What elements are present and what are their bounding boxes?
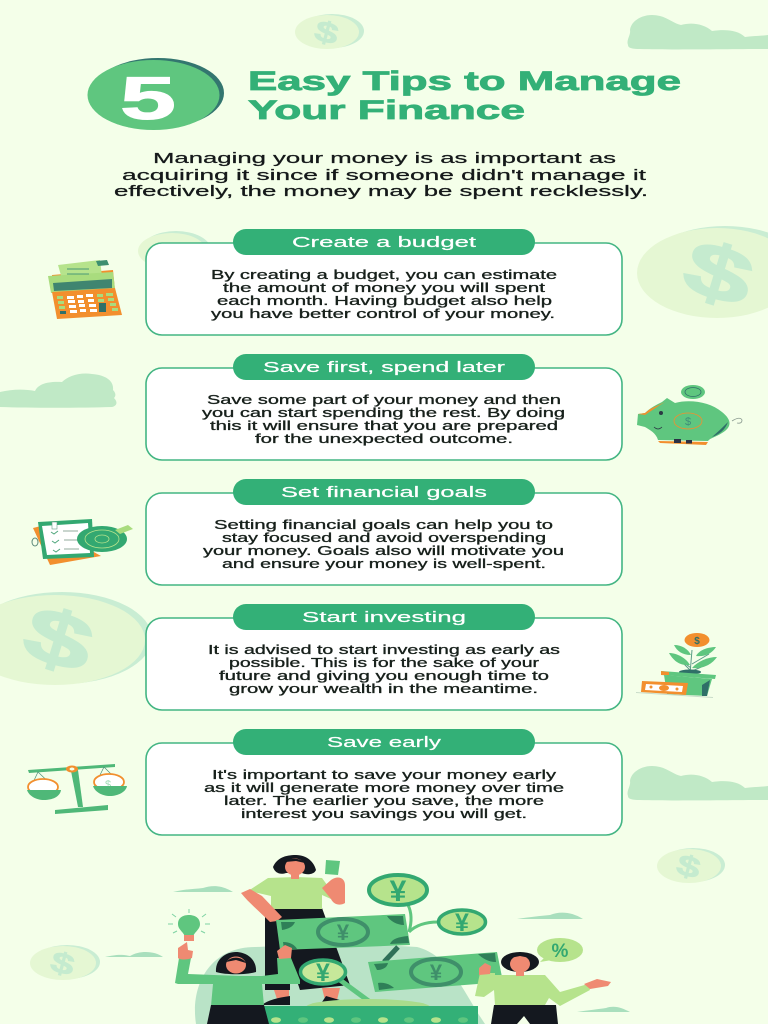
panel: set financial goals <box>146 479 622 585</box>
intro text: Managing your money is as important as <box>153 150 616 167</box>
panel: create a budget <box>146 229 622 335</box>
panel: create a budget: Create a budget <box>292 235 476 251</box>
percent bubble <box>537 938 583 962</box>
background coin: top: $ <box>311 13 342 51</box>
yen coins <box>300 875 486 987</box>
yen coins: ¥ <box>390 875 407 908</box>
money tree stems <box>408 905 438 932</box>
background cloud: lower right <box>628 766 768 800</box>
background coin: right: $ <box>674 223 763 324</box>
background coin: lower left <box>30 944 100 982</box>
bill top <box>276 914 410 950</box>
background cloud: middle left <box>0 373 116 408</box>
panel: create a budget: By creating a budget, you can estimate <box>211 268 557 282</box>
panel: set financial goals: your money. Goals also will motivate you <box>203 544 564 558</box>
panel: save early: interest you savings you will get. <box>241 807 527 821</box>
panel: create a budget: the amount of money you will spent <box>223 281 546 295</box>
panel: create a budget: you have better control of your money. <box>211 307 555 321</box>
intro text: acquiring it since if someone didn't manage it <box>122 167 647 184</box>
icon: calculator <box>48 260 122 319</box>
background cloud: top right <box>628 15 768 49</box>
background coin: right <box>637 223 768 324</box>
intro text: effectively, the money may be spent recklessly. <box>114 183 648 200</box>
panel: save early: later. The earlier you save, the more <box>224 794 544 808</box>
small clouds <box>105 886 630 1012</box>
number badge <box>88 58 224 132</box>
bill lower <box>368 952 503 992</box>
panel: set financial goals: Set financial goals <box>281 485 487 501</box>
icon: money plant <box>636 633 717 698</box>
panel: save first, spend later: for the unexpected outcome. <box>255 432 513 446</box>
panel: save early: as it will generate more money over time <box>204 781 564 795</box>
percent bubble: % <box>552 941 569 962</box>
panel: start investing: grow your wealth in the meantime. <box>229 682 538 696</box>
panel: save early: It's important to save your money early <box>212 768 557 782</box>
icon: balance scale: $ <box>105 779 111 791</box>
icon: piggy bank: $ <box>685 416 691 428</box>
panel: save first, spend later: Save some part of your money and then <box>207 393 561 407</box>
panel: save first, spend later <box>146 354 622 460</box>
background coin: lower left: $ <box>47 944 78 982</box>
background coin: lower right <box>657 847 725 885</box>
panel: save early <box>146 729 622 835</box>
panel: save first, spend later: Save first, spend later <box>263 360 505 376</box>
panel: start investing <box>146 604 622 710</box>
background coin: top <box>295 13 364 51</box>
panel: save first, spend later: this it will ensure that you are prepared <box>210 419 558 433</box>
title <box>248 66 681 125</box>
title: Easy Tips to Manage <box>248 66 681 96</box>
panel: save first, spend later: you can start spending the rest. By doing <box>202 406 565 420</box>
yen coins: ¥ <box>316 959 330 987</box>
panel: start investing: It is advised to start investing as early as <box>208 643 560 657</box>
panel: set financial goals: Setting financial goals can help you to <box>214 518 553 532</box>
icon: piggy bank <box>637 385 742 445</box>
light bulb <box>168 909 210 941</box>
woman lower left <box>175 942 300 1024</box>
woman lower right <box>475 952 611 1024</box>
bottom illustration: people and money <box>105 855 630 1024</box>
icon: money plant: $ <box>694 636 700 647</box>
icon: goal checklist and target <box>32 519 133 565</box>
icon: balance scale <box>27 764 127 814</box>
bill lower: ¥ <box>430 960 443 985</box>
hill <box>195 945 485 1024</box>
yen coins: ¥ <box>455 909 469 937</box>
panel: start investing: possible. This is for the sake of your <box>229 656 539 670</box>
panel: save early: Save early <box>327 735 442 751</box>
panel: start investing: Start investing <box>302 610 466 626</box>
title: Your Finance <box>248 95 525 125</box>
background coin: lower right: $ <box>673 847 704 885</box>
background coin: left: $ <box>14 589 103 690</box>
background coin: behind first card <box>138 231 211 269</box>
panel: create a budget: each month. Having budget also help <box>217 294 552 308</box>
bill top: ¥ <box>337 920 350 945</box>
standing woman <box>241 855 350 1005</box>
panel: set financial goals: stay focused and avoid overspending <box>222 531 546 545</box>
panel: start investing: future and giving you enough time to <box>219 669 549 683</box>
intro text <box>114 150 648 200</box>
mound and money box <box>306 999 430 1015</box>
panel: set financial goals: and ensure your money is well-spent. <box>222 557 546 571</box>
number badge: 5 <box>120 65 176 132</box>
background coin: left <box>0 589 152 690</box>
